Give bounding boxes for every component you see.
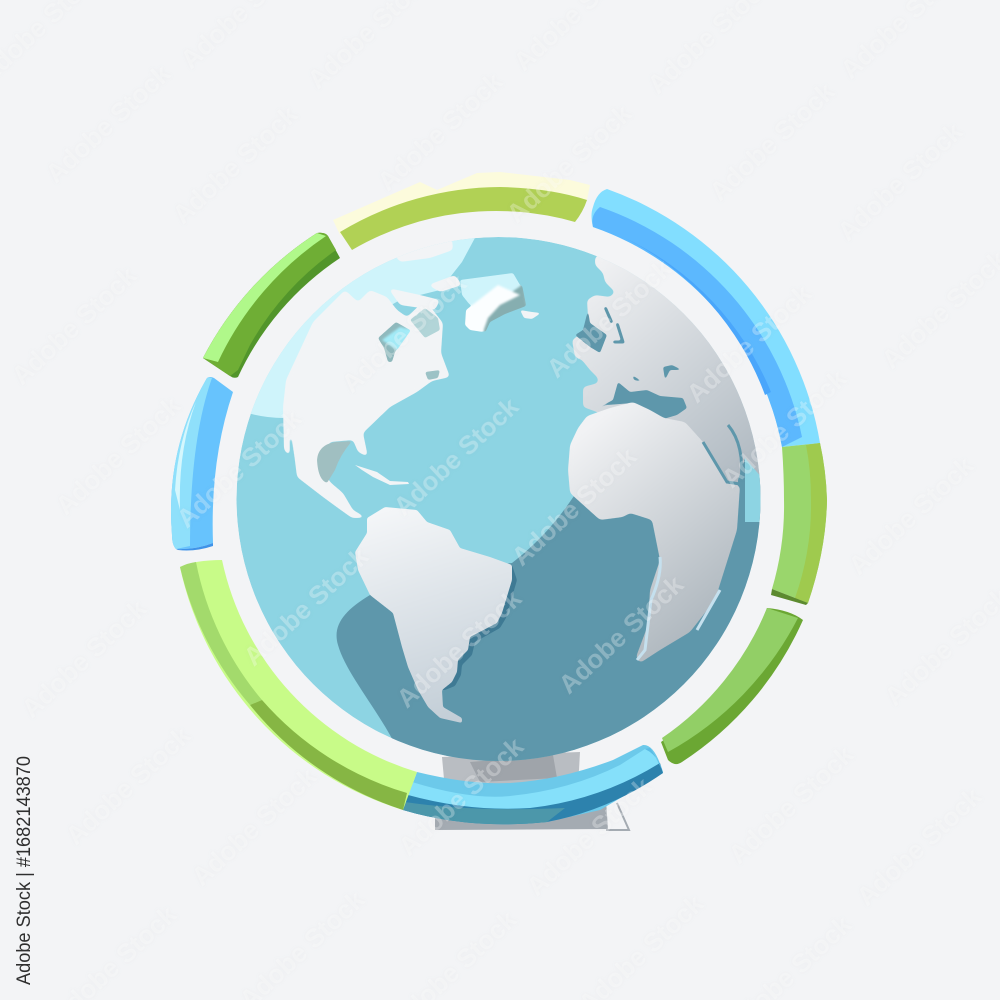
north sea — [575, 307, 623, 353]
watermark: Adobe Stock — [832, 116, 969, 247]
africa coast highlights — [637, 557, 720, 660]
watermark: Adobe Stock — [388, 391, 525, 522]
south america shadow — [440, 560, 517, 690]
ring segment: lower right green — [661, 608, 803, 764]
watermark: Adobe Stock — [541, 253, 678, 384]
ring segment: right green — [771, 443, 827, 605]
watermark: Adobe Stock — [553, 569, 690, 700]
ring segment: lower left green — [180, 560, 417, 810]
ocean — [236, 237, 760, 761]
greenland — [460, 273, 541, 333]
watermark: Adobe Stock — [681, 278, 818, 409]
watermark: Adobe Stock — [50, 390, 187, 521]
watermark: Adobe Stock — [372, 66, 509, 197]
hudson bay — [378, 308, 440, 380]
watermark: Adobe Stock — [40, 58, 177, 189]
ring segment: top green with cream highlight — [333, 172, 590, 250]
watermark: Adobe Stock — [336, 268, 473, 399]
watermark: Adobe Stock — [723, 739, 860, 870]
watermark: Adobe Stock — [521, 771, 658, 902]
globe — [236, 237, 760, 761]
eurasia — [572, 256, 760, 518]
caribbean islands — [355, 465, 409, 485]
watermark: Adobe Stock — [716, 363, 853, 494]
watermark: Adobe Stock — [167, 99, 304, 230]
red sea channel — [738, 458, 745, 510]
south america — [355, 507, 512, 723]
watermark: Adobe Stock — [704, 76, 841, 207]
ring segment: bottom blue — [403, 745, 663, 824]
watermark: Adobe Stock — [186, 761, 323, 892]
gulf of mexico — [317, 441, 352, 483]
watermark: Adobe Stock — [851, 781, 988, 912]
north america — [283, 290, 450, 518]
globe stand — [435, 752, 629, 830]
watermark: Adobe Stock — [238, 541, 375, 672]
polar light region — [251, 238, 475, 418]
watermark: Adobe Stock — [60, 720, 197, 851]
arctic islands and blob — [391, 241, 460, 310]
ring segment: left blue — [171, 377, 233, 550]
africa — [568, 402, 740, 663]
watermark: Adobe Stock — [171, 403, 308, 534]
ocean shadow — [336, 478, 760, 761]
watermark: Adobe Stock — [16, 593, 153, 724]
watermark: Adobe Stock — [391, 583, 528, 714]
east africa coast lines — [703, 425, 742, 484]
ring segment: upper right blue — [592, 189, 820, 447]
indian ocean patch — [745, 458, 762, 522]
ring segment: upper left green — [203, 233, 340, 378]
watermark: Adobe Stock — [506, 441, 643, 572]
watermark: Adobe Stock — [501, 98, 638, 229]
watermark: Adobe Stock — [393, 731, 530, 862]
watermark: Adobe Stock — [843, 450, 980, 581]
watermark: Adobe Stock — [6, 260, 143, 391]
vertical credit text: Adobe Stock | #1682143870 — [13, 756, 35, 985]
mediterranean sea — [602, 365, 686, 418]
